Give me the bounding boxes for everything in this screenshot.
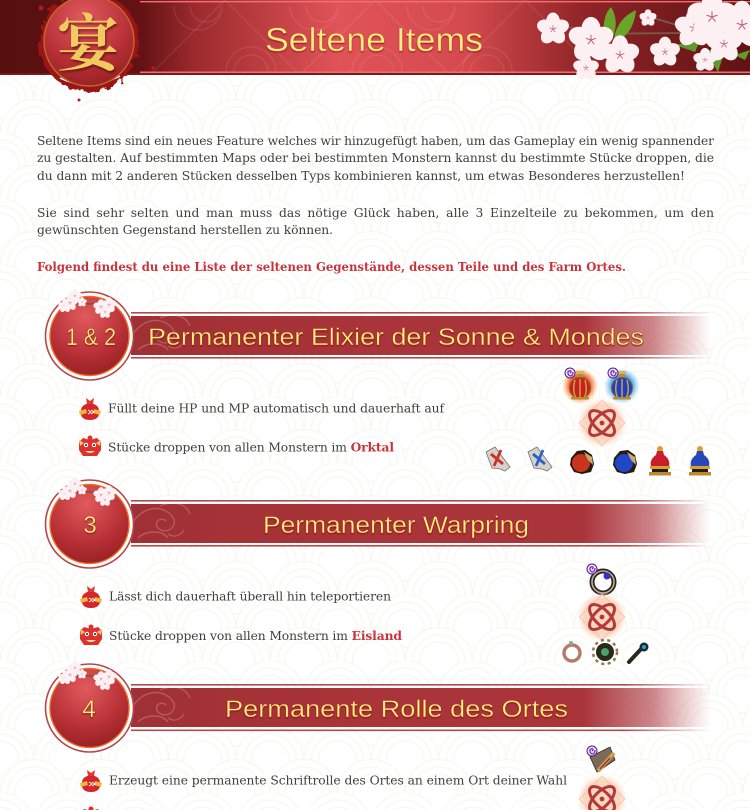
section 2 title: Permanenter Warpring [263, 512, 529, 539]
section 1 drop row [79, 436, 394, 456]
warp ring [587, 564, 614, 593]
intro text: Seltene Items sind ein neues Feature welches wir hinzugefügt haben, um das Gameplay ein wenig spannender [37, 134, 714, 148]
section 3 drop icon, cut off [80, 806, 102, 810]
section 1 header [46, 289, 711, 380]
section 1 effect row: Füllt deine HP und MP automatisch und dauerhaft auf [108, 402, 445, 416]
staff piece [629, 642, 648, 662]
red bottle [649, 446, 671, 476]
section 2 effect row: Lässt dich dauerhaft überall hin teleportieren [109, 590, 391, 604]
scroll of place [587, 746, 615, 772]
copper ring piece [564, 641, 580, 661]
header banner [0, 0, 750, 75]
section 3 effect row [80, 770, 567, 792]
section 2 header [46, 477, 711, 568]
section 3 header [46, 661, 711, 752]
section 2 drop row [80, 624, 402, 645]
gem piece [593, 640, 617, 664]
seal with character [38, 0, 155, 102]
combine emblem [577, 592, 627, 642]
intro text [37, 134, 714, 237]
intro text: zu gestalten. Auf bestimmten Maps oder bei bestimmten Monstern kannst du bestimmte Stücke droppen, die [37, 151, 714, 165]
red scroll piece [486, 447, 510, 471]
title: Seltene Items [265, 21, 483, 58]
section 3 items [577, 746, 627, 810]
combine emblem [577, 774, 627, 810]
blue scroll piece [528, 447, 552, 471]
section 2 drop row: Stücke droppen von allen Monstern im Eisland [109, 628, 402, 643]
section 3 effect row: Erzeugt eine permanente Schriftrolle des Ortes an einem Ort deiner Wahl [109, 774, 567, 788]
section 3 title: Permanente Rolle des Ortes [225, 696, 568, 723]
red fragment [570, 450, 594, 474]
intro text: du dann mit 2 anderen Stücken desselben Typs kombinieren kannst, um etwas Besonderes herzustellen! [37, 169, 685, 183]
section 2 effect row [80, 586, 391, 608]
elixir of sun [562, 368, 598, 404]
section 2 items [564, 564, 648, 664]
intro text: Sie sind sehr selten und man muss das nötige Glück haben, alle 3 Einzelteile zu bekommen, um den [37, 206, 714, 220]
red note: Folgend findest du eine Liste der seltenen Gegenstände, dessen Teile und des Farm Ortes. [37, 259, 626, 274]
combine emblem [577, 398, 627, 448]
elixir of moon [604, 368, 640, 404]
section 2 number: 3 [83, 512, 97, 539]
section 1 number: 1 & 2 [66, 324, 116, 351]
section 1 title: Permanenter Elixier der Sonne & Mondes [148, 324, 644, 351]
blue fragment [613, 450, 637, 474]
section 1 drop row: Stücke droppen von allen Monstern im Orktal [108, 440, 394, 454]
section 3 number: 4 [82, 696, 96, 723]
section 1 items [486, 368, 711, 476]
section 1 effect row [79, 398, 445, 420]
cherry blossom branch [535, 0, 750, 82]
intro text: gewünschten Gegenstand herstellen zu können. [37, 223, 333, 237]
blue bottle [689, 446, 711, 476]
